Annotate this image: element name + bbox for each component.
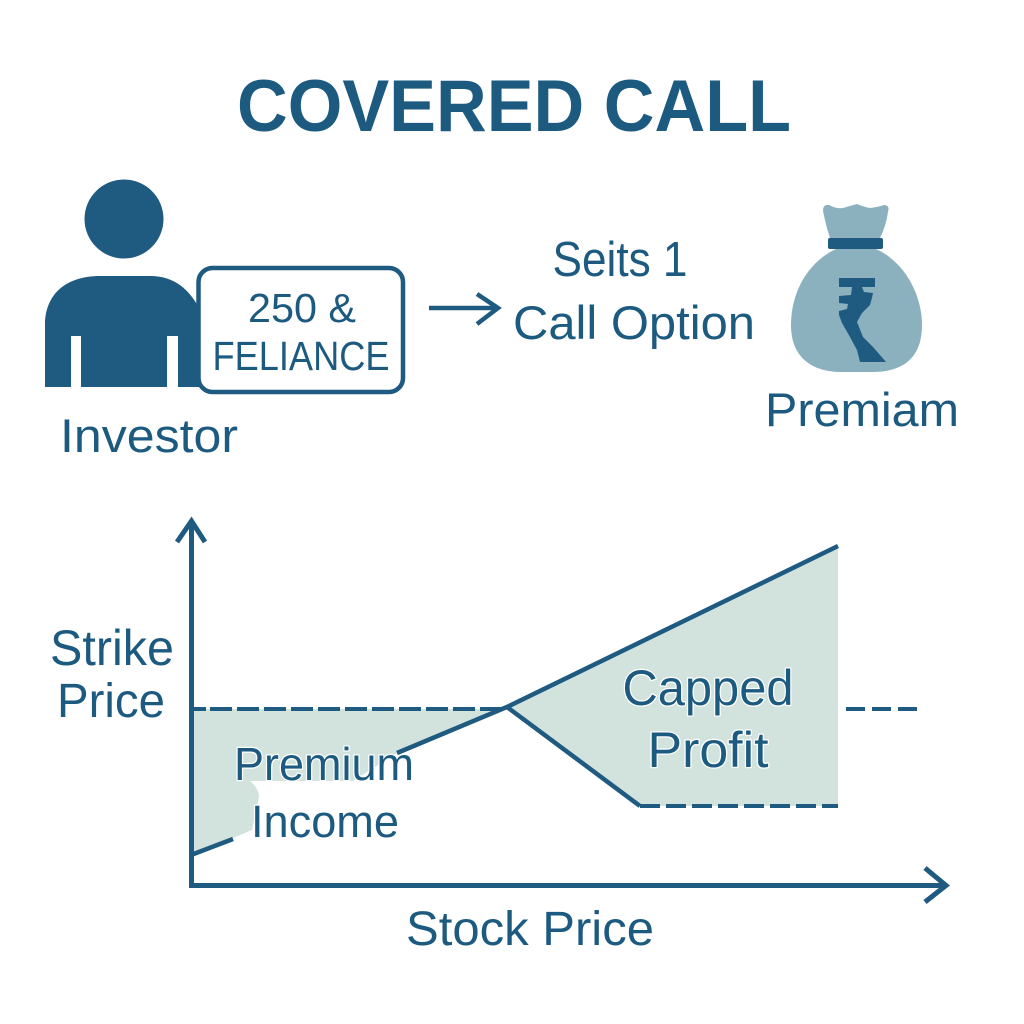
premium label: Premiam [765, 383, 959, 436]
icon: investor [45, 180, 200, 387]
arrow: sells [429, 294, 498, 324]
holding box [198, 268, 403, 392]
payoff chart [50, 521, 946, 956]
icon: money bag [791, 204, 922, 372]
capped line [507, 707, 640, 806]
capped profit label: Profit [648, 722, 769, 778]
sells text: Seits 1 [552, 233, 688, 287]
capped profit label: Capped [622, 660, 794, 716]
x axis [189, 868, 946, 902]
sells text [513, 233, 755, 349]
x axis label: Stock Price [406, 903, 654, 956]
payoff line [191, 546, 838, 855]
dashed right segment [846, 707, 918, 711]
dashed cap line [640, 804, 838, 808]
y axis label: Strike [50, 620, 174, 676]
holding box: 250 & [248, 285, 356, 331]
y axis [177, 521, 205, 886]
premium income label [234, 738, 414, 847]
shaded area: premium income [192, 709, 505, 855]
title: COVERED CALL [237, 66, 791, 147]
premium income label: Premium [234, 738, 414, 790]
premium income label: Income [251, 796, 399, 847]
sells text: Call Option [513, 296, 755, 349]
shaded area: capped profit [507, 546, 838, 806]
y axis label: Price [57, 675, 165, 728]
y axis label [50, 620, 174, 728]
dashed strike line [192, 707, 505, 711]
holding box: FELIANCE [212, 333, 390, 379]
capped profit label [622, 660, 794, 778]
investor label: Investor [60, 409, 238, 462]
